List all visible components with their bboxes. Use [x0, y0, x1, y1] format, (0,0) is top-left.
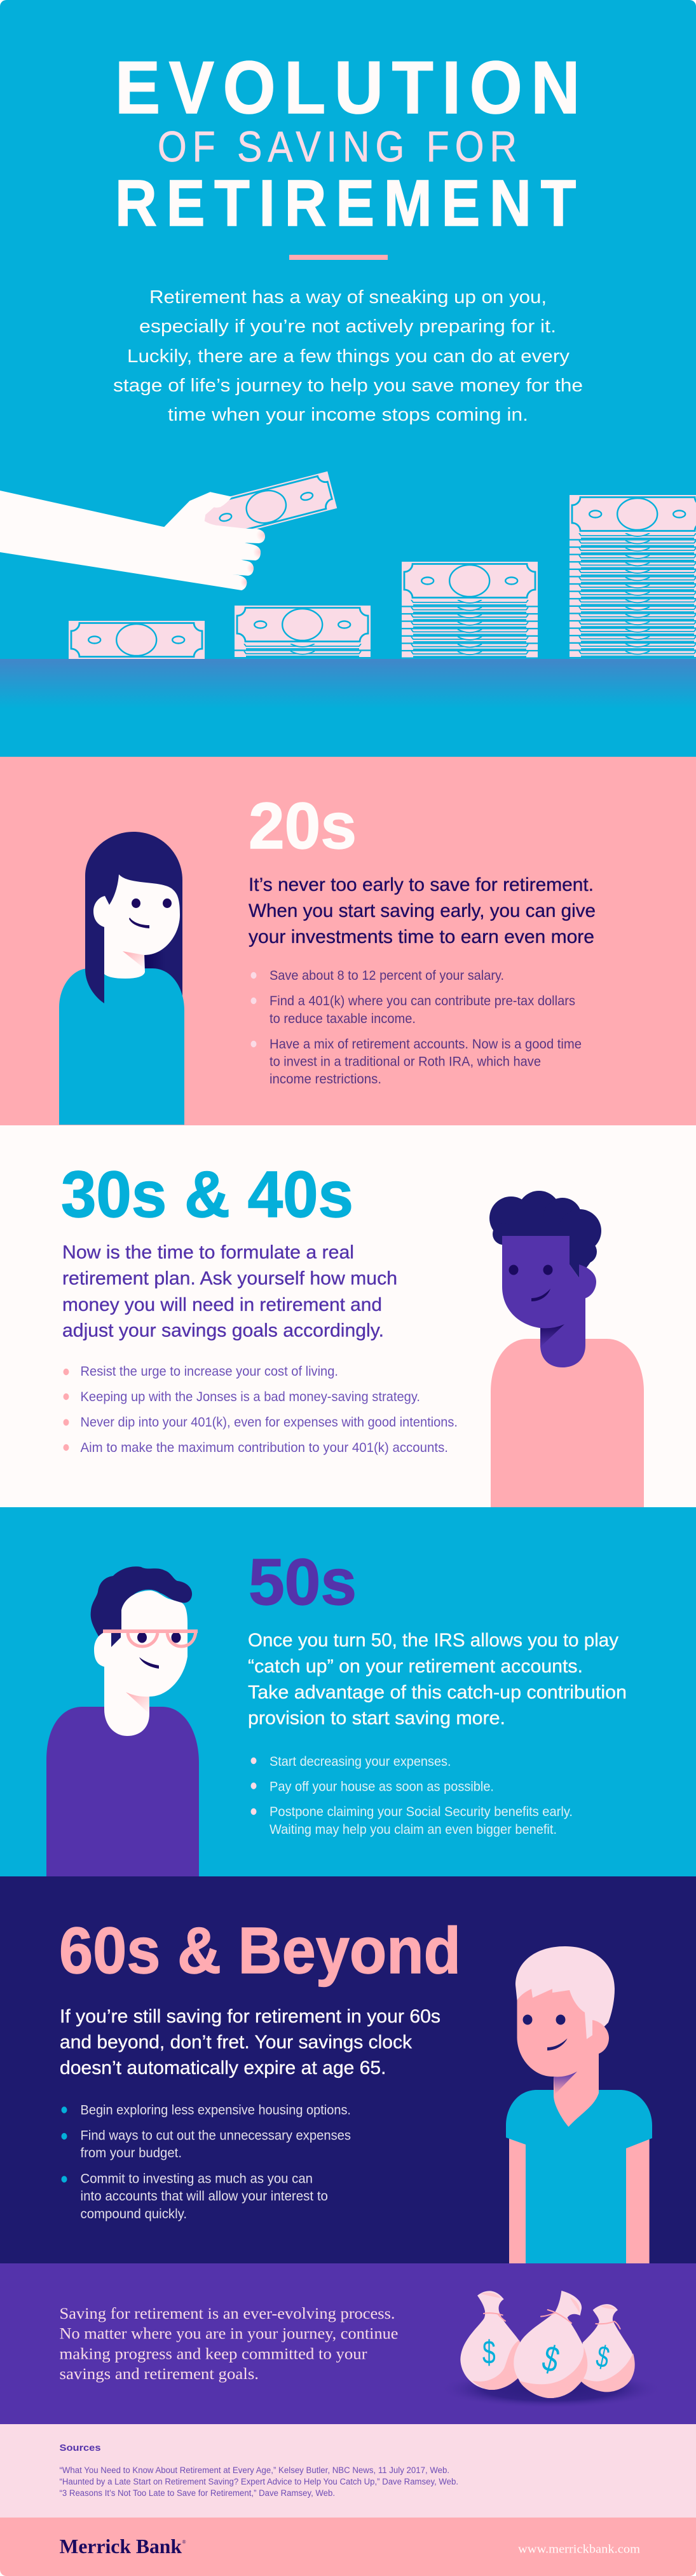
bullet list: income restrictions.	[270, 1071, 381, 1087]
money stack 3	[402, 562, 538, 659]
bullet list: Have a mix of retirement accounts. Now is a good time	[270, 1036, 582, 1052]
intro text: Now is the time to formulate a real	[62, 1242, 354, 1263]
intro text: “catch up” on your retirement accounts.	[248, 1656, 583, 1677]
intro text	[248, 1630, 627, 1729]
icon: hand holding bill	[0, 471, 337, 590]
money stack 2	[235, 606, 371, 658]
closing text: savings and retirement goals.	[60, 2366, 259, 2383]
title: of saving for: OF SAVING FOR	[158, 123, 522, 171]
panel: 20s	[0, 757, 696, 1125]
bullet list: Pay off your house as soon as possible.	[270, 1779, 494, 1794]
bullet list	[250, 1754, 573, 1837]
icon: money bags	[439, 2291, 663, 2408]
character: man with glasses	[46, 1566, 199, 1876]
intro text: retirement plan. Ask yourself how much	[62, 1268, 397, 1289]
intro text: stage of life’s journey to help you save money for the	[113, 376, 583, 396]
bullet list: Aim to make the maximum contribution to your 401(k) accounts.	[80, 1440, 448, 1455]
bullet list: Commit to investing as much as you can	[80, 2171, 313, 2186]
intro text: Take advantage of this catch-up contribution	[248, 1682, 627, 1703]
bullet list: compound quickly.	[80, 2206, 187, 2221]
intro text	[113, 287, 583, 425]
heading: 30s and 40s: 30s & 40s	[61, 1158, 353, 1231]
bullet list: Waiting may help you claim an even bigger benefit.	[270, 1822, 557, 1837]
closing text: making progress and keep committed to your	[60, 2345, 367, 2362]
intro text: If you’re still saving for retirement in your 60s	[60, 2006, 440, 2027]
heading: 20s: 20s	[249, 789, 357, 862]
sources list: “What You Need to Know About Retirement at Every Age,” Kelsey Butler, NBC News, 11 July 2017, Web.	[60, 2465, 449, 2475]
intro text: adjust your savings goals accordingly.	[62, 1320, 384, 1341]
logo: Merrick Bank: Merrick Bank	[60, 2535, 182, 2558]
bullet list: to reduce taxable income.	[270, 1011, 416, 1026]
intro text	[249, 874, 596, 947]
panel: header	[0, 0, 696, 757]
intro text: especially if you’re not actively preparing for it.	[139, 316, 556, 337]
heading: 60s and beyond: 60s & Beyond	[59, 1914, 461, 1987]
bullet list: Begin exploring less expensive housing options.	[80, 2103, 351, 2118]
panel: closing message	[0, 2263, 696, 2424]
bullet list	[250, 968, 582, 1087]
icon: glasses	[103, 1629, 198, 1646]
panel: sources	[0, 2424, 696, 2518]
bullet list	[64, 1364, 458, 1455]
closing text: No matter where you are in your journey, continue	[60, 2326, 398, 2343]
character: older man	[506, 1946, 652, 2263]
character: curly-haired man	[489, 1191, 644, 1507]
character: young woman	[59, 832, 184, 1125]
sources list: “3 Reasons It’s Not Too Late to Save for Retirement,” Dave Ramsey, Web.	[60, 2488, 335, 2498]
heading: 50s: 50s	[249, 1545, 357, 1618]
shelf	[0, 659, 696, 708]
closing text	[60, 2305, 398, 2383]
intro text: money you will need in retirement and	[62, 1294, 382, 1315]
bullet list: Find ways to cut out the unnecessary expenses	[80, 2128, 351, 2143]
intro text	[62, 1242, 397, 1341]
intro text: It’s never too early to save for retirement.	[249, 874, 594, 895]
bullet list: into accounts that will allow your interest to	[80, 2188, 328, 2204]
sources list	[60, 2465, 458, 2498]
bullet list: Save about 8 to 12 percent of your salary.	[270, 968, 504, 983]
intro text: provision to start saving more.	[248, 1708, 505, 1729]
bullet list: Resist the urge to increase your cost of living.	[80, 1364, 338, 1379]
intro text: doesn’t automatically expire at age 65.	[60, 2057, 386, 2078]
intro text: and beyond, don’t fret. Your savings clock	[60, 2032, 413, 2053]
intro text: your investments time to earn even more	[249, 926, 594, 947]
sources heading: Sources	[60, 2443, 100, 2453]
intro text: Luckily, there are a few things you can do at every	[127, 346, 570, 367]
icon: money bags: $	[538, 2337, 564, 2380]
logo: Merrick Bank: ®	[182, 2539, 186, 2545]
bullet list	[61, 2103, 351, 2221]
accent bar	[289, 255, 388, 260]
intro text: Once you turn 50, the IRS allows you to play	[248, 1630, 618, 1651]
bullet list: Find a 401(k) where you can contribute pre-tax dollars	[270, 993, 575, 1008]
panel: footer	[0, 2518, 696, 2576]
intro text: time when your income stops coming in.	[168, 405, 528, 425]
panel: 30s and 40s	[0, 1125, 696, 1507]
website url: www.merrickbank.com	[518, 2543, 640, 2556]
money stack 4	[570, 495, 696, 658]
bullet list: Never dip into your 401(k), even for expenses with good intentions.	[80, 1414, 458, 1430]
bullet list: Start decreasing your expenses.	[270, 1754, 451, 1769]
panel: 60s and beyond	[0, 1876, 696, 2263]
bullet list: to invest in a traditional or Roth IRA, which have	[270, 1054, 541, 1069]
icon: money bags: $	[482, 2333, 496, 2371]
icon: money bags: $	[593, 2338, 612, 2375]
money stack 1	[69, 621, 205, 659]
bullet list: from your budget.	[80, 2145, 182, 2160]
panel: 50s	[0, 1507, 696, 1876]
bullet list: Keeping up with the Jonses is a bad money-saving strategy.	[80, 1389, 420, 1404]
title: evolution: EVOLUTION	[115, 46, 589, 129]
sources list: “Haunted by a Late Start on Retirement Saving? Expert Advice to Help You Catch Up,” Dave Ramsey, Web.	[60, 2477, 458, 2486]
intro text	[60, 2006, 440, 2078]
intro text: When you start saving early, you can give	[249, 900, 596, 921]
intro text: Retirement has a way of sneaking up on you,	[149, 287, 547, 308]
closing text: Saving for retirement is an ever-evolving process.	[60, 2305, 395, 2322]
bullet list: Postpone claiming your Social Security benefits early.	[270, 1804, 573, 1819]
title: retirement: RETIREMENT	[115, 166, 585, 240]
